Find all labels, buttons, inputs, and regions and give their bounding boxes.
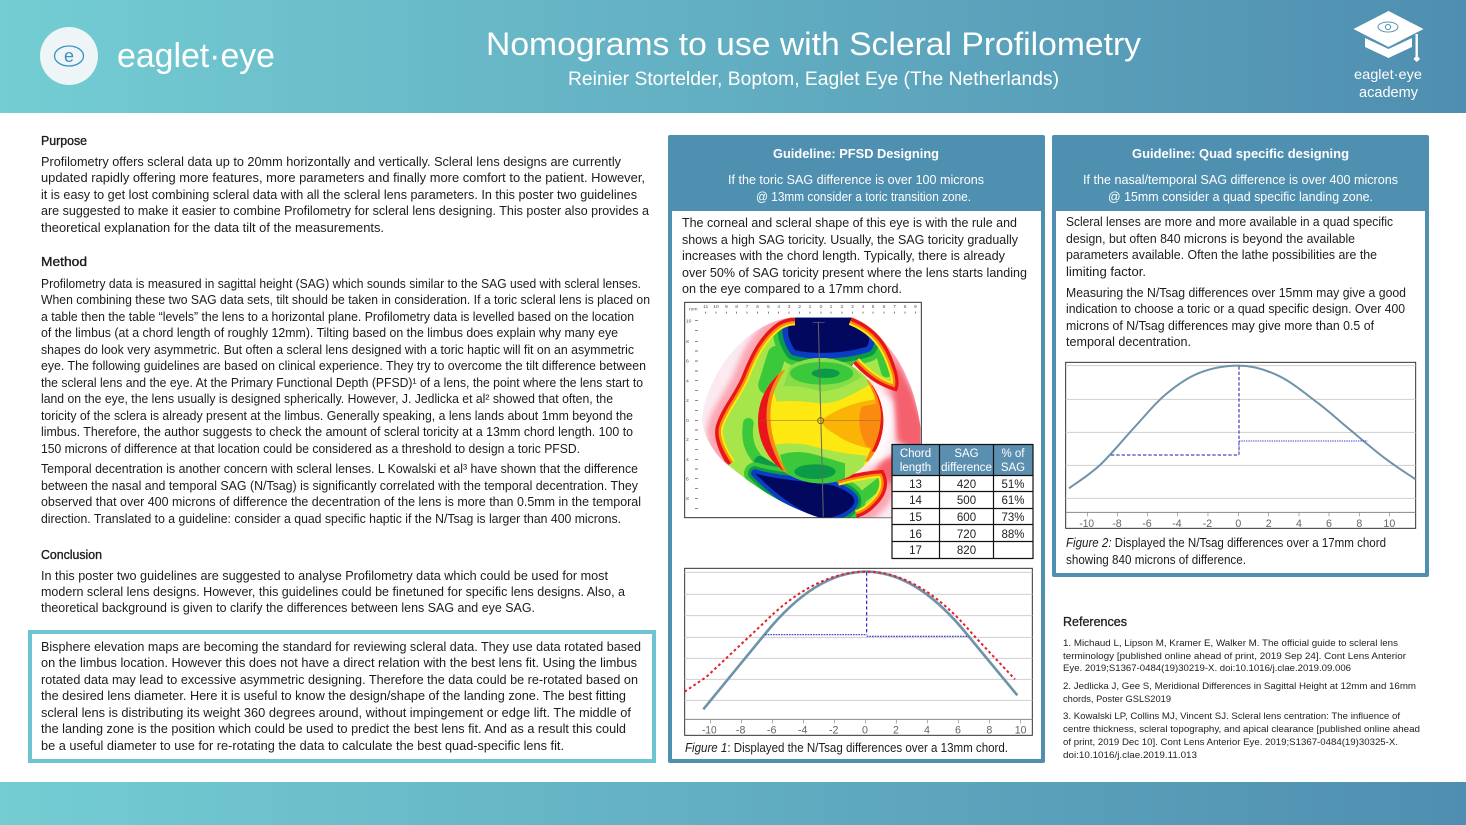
table: chord length vs SAG difference: 14: [909, 495, 922, 507]
panel heading: quad specific: If the nasal/temporal SAG difference is over 400 microns: [1083, 172, 1398, 187]
map axis scale: 1: [809, 304, 812, 310]
table: chord length vs SAG difference: 13: [909, 479, 922, 491]
purpose text: it is easy to get lost combining scleral data with all the scleral lens parameters. In this poster two guidelines: [41, 187, 637, 202]
callout: bisphere elevation maps: [30, 632, 654, 761]
map axis scale: 8: [686, 496, 689, 502]
method text: of the limbus (at a chord length of roughly 12mm). Tilting based on the limbus does explain why many eye: [41, 325, 618, 340]
purpose text: are suggested to make it easier to combine Profilometry for scleral lens designing. This poster also provides a: [41, 203, 650, 218]
callout: bisphere elevation maps: rotated data may lead to excessive asymmetric designing. Therefore the data could be re-rotated based on: [41, 672, 638, 687]
table: chord length vs SAG difference: % of: [1001, 448, 1025, 460]
heading: conclusion: Conclusion: [41, 547, 102, 562]
map axis scale: 10: [686, 318, 692, 324]
map axis scale: 7: [893, 304, 896, 310]
table: chord length vs SAG difference: 15: [909, 512, 922, 524]
purpose text: [41, 154, 650, 235]
callout: bisphere elevation maps: be a useful diameter to use for re-rotating the data to calculate the best quad-specific lens fit.: [41, 738, 564, 753]
panel: quad specific guideline: [1052, 135, 1429, 577]
panel heading: PFSD: Guideline: PFSD Designing: [773, 146, 939, 161]
chart 1 axis labels: [702, 724, 1027, 736]
method text: eye. The following guidelines are based on clinical experience. They try to overcome the tilt difference between: [41, 358, 646, 373]
map axis scale: 2: [841, 304, 844, 310]
method text: land on the eye, the lens usually is designed spherically. However, J. Jedlicka et al² showed that often, the: [41, 391, 613, 406]
map axis scale: 3: [851, 304, 854, 310]
chart 2 axis labels: 10: [1383, 518, 1395, 530]
table: chord length vs SAG difference: SAG: [954, 448, 979, 460]
table: chord length vs SAG difference: 500: [957, 495, 976, 507]
PFSD body text: shows a high SAG toricity. Usually, the SAG toricity gradually: [682, 232, 1018, 247]
method text: When combining these two SAG data sets, tilt should be taken in consideration. If a toric scleral lens is placed on: [41, 292, 650, 307]
map axis scale: 8: [686, 339, 689, 345]
PFSD body text: The corneal and scleral shape of this eye is with the rule and: [682, 215, 1017, 230]
map axis scale: 0: [686, 418, 689, 424]
table: chord length vs SAG difference: Chord: [900, 448, 931, 460]
quad specific body text: temporal decentration.: [1066, 334, 1191, 349]
map axis scale: 4: [862, 304, 865, 310]
panel: PFSD designing guideline: [668, 135, 1045, 763]
map axis scale: 3: [788, 304, 791, 310]
chart: N/Tsag differences over 13mm: [685, 568, 1032, 736]
table: chord length vs SAG difference: 17: [909, 545, 922, 557]
header banner: [0, 0, 1466, 113]
map axis scale: mm: [689, 307, 697, 313]
map axis scale: 4: [686, 378, 689, 384]
chart 1 axis labels: 2: [893, 724, 899, 736]
method text: shapes do look very asymmetric. But often a scleral lens designed with a toric haptic will fit on an asymmetric: [41, 342, 634, 357]
method text: [41, 276, 650, 526]
method text: toricity of the sclera is already present at the limbus. Generally speaking, a lens lands about 1mm beyond the: [41, 408, 633, 423]
table: chord length vs SAG difference: SAG: [1001, 462, 1025, 474]
reference list: chords, Poster GSLS2019: [1063, 694, 1171, 705]
reference list: doi:10.1016/j.clae.2019.11.013: [1063, 750, 1197, 761]
chart 1 axis labels: 0: [862, 724, 868, 736]
table: chord length vs SAG difference: 16: [909, 529, 922, 541]
purpose text: theoretical explanation for the data tilt of the measurements.: [41, 220, 384, 235]
chart 1 axis labels: 6: [955, 724, 961, 736]
purpose text: Profilometry offers scleral data up to 20mm horizontally and vertically. Scleral lens designs are currently: [41, 154, 621, 169]
map axis scale: 5: [872, 304, 875, 310]
chart 1 axis labels: 4: [924, 724, 930, 736]
callout: bisphere elevation maps: the landing zone is the position which could be used to predict the best lens fit. And as a result this could: [41, 721, 626, 736]
chart 1 axis labels: -10: [702, 724, 717, 736]
map axis scale: 11: [703, 304, 708, 310]
reference list: 1. Michaud L, Lipson M, Kramer E, Walker M. The official guide to scleral lens: [1063, 638, 1398, 649]
purpose text: updated rapidly offering more features, more parameters and finally more comfort to the patient. However,: [41, 170, 645, 185]
figure 1 caption: Figure 1: Displayed the N/Tsag differences over a 13mm chord.: [685, 740, 1008, 755]
quad specific body text: Measuring the N/Tsag differences over 15mm may give a good: [1066, 285, 1406, 300]
table: chord length vs SAG difference: 420: [957, 479, 976, 491]
table: chord length vs SAG difference: 820: [957, 545, 976, 557]
callout: bisphere elevation maps: the desired lens diameter. Here it is useful to know the design/shape of the landing zone. The best fitting: [41, 688, 626, 703]
method text: limbus. Therefore, the author suggests to check the amount of scleral toricity at a 13mm chord length. 100 to: [41, 424, 633, 439]
logo: eaglet eye academy cap: [1354, 11, 1424, 101]
subtitle: Reinier Stortelder, Boptom, Eaglet Eye (The Netherlands): [568, 69, 1059, 90]
quad specific body text: design, but often 840 microns is beyond the available: [1066, 231, 1355, 246]
quad specific body text: [1066, 214, 1406, 349]
quad specific body text: Scleral lenses are more and more available in a quad specific: [1066, 214, 1393, 229]
section: purpose: [41, 133, 650, 235]
quad specific body text: parameters available. Often the lathe possibilities are the: [1066, 247, 1377, 262]
method text: observed that over 400 microns of difference the decentration of the lens is more than 0.5mm in the temporal: [41, 494, 641, 509]
map axis scale: 6: [686, 359, 689, 365]
conclusion text: In this poster two guidelines are suggested to analyse Profilometry data which could be used for most: [41, 568, 608, 583]
map axis scale: 8: [904, 304, 907, 310]
method text: the scleral lens and the eye. At the Primary Functional Depth (PFSD)¹ of a lens, the point where the lens start to: [41, 375, 643, 390]
method text: direction. Translated to a guideline: consider a quad specific haptic if the N/Tsag is larger than 400 microns.: [41, 511, 621, 526]
reference list: [1063, 638, 1420, 761]
chart 2 axis labels: -2: [1203, 518, 1212, 530]
map axis scale: 1: [830, 304, 833, 310]
map axis scale: 4: [777, 304, 780, 310]
chart 2 axis labels: -6: [1142, 518, 1152, 530]
method text: Temporal decentration is another concern with scleral lenses. L Kowalski et al³ have shown that the difference: [41, 461, 638, 476]
chart: N/Tsag differences over 17mm: [1066, 362, 1416, 530]
table: chord length vs SAG difference: 88%: [1001, 529, 1025, 541]
map axis scale: 5: [767, 304, 770, 310]
map axis scale: 6: [756, 304, 759, 310]
PFSD body text: [682, 215, 1027, 296]
chart 1 axis labels: 10: [1015, 724, 1027, 736]
map axis scale: 0: [820, 304, 823, 310]
reference list: 2. Jedlicka J, Gee S, Meridional Differences in Sagittal Height at 12mm and 16mm: [1063, 681, 1416, 692]
conclusion text: [41, 568, 626, 615]
logo: eaglet eye: e: [64, 46, 74, 66]
chart 2 axis labels: -10: [1079, 518, 1094, 530]
panel heading: PFSD: [728, 146, 984, 204]
section: method: [41, 254, 650, 526]
conclusion text: modern scleral lens designs. However, this guidelines could be finetuned for specific lens designs. Also, a: [41, 584, 626, 599]
figure 2 caption: showing 840 microns of difference.: [1066, 552, 1246, 567]
footer banner: [0, 782, 1466, 825]
callout: bisphere elevation maps: on the limbus location. However this does not have a direct relation with the best lens fit. Using the limbus: [41, 655, 637, 670]
panel heading: quad specific: @ 15mm consider a quad specific landing zone.: [1108, 189, 1373, 204]
chart 1 axis labels: -4: [798, 724, 807, 736]
reference list: terminology [published online ahead of print, 2019 Sep 24]. Cont Lens Anterior: [1063, 651, 1407, 662]
PFSD body text: over 50% of SAG toricity present where the lens starts landing: [682, 265, 1027, 280]
map axis scale: 9: [725, 304, 728, 310]
panel heading: quad specific: [1083, 146, 1398, 204]
chart 2 axis labels: 0: [1235, 518, 1241, 530]
chart 2 axis labels: 8: [1356, 518, 1362, 530]
map axis scale: 9: [914, 304, 917, 310]
heading: purpose: Purpose: [41, 133, 87, 148]
table: chord length vs SAG difference: 720: [957, 529, 976, 541]
map axis scale: 6: [686, 476, 689, 482]
table: chord length vs SAG difference: difference: [941, 462, 992, 474]
references heading: References: [1063, 614, 1127, 629]
conclusion text: theoretical background is given to clarify the differences between lens SAG and eye SAG.: [41, 600, 535, 615]
chart 2 axis labels: 2: [1266, 518, 1272, 530]
table: chord length vs SAG difference: 73%: [1001, 512, 1025, 524]
chart 1 axis labels: -6: [767, 724, 776, 736]
panel heading: quad specific: Guideline: Quad specific designing: [1132, 146, 1349, 161]
table: chord length vs SAG difference: 600: [957, 512, 976, 524]
map axis scale: 6: [883, 304, 886, 310]
method text: Profilometry data is measured in sagittal height (SAG) which sounds similar to the SAG used with scleral lenses.: [41, 276, 641, 291]
chart 2 axis labels: [1079, 518, 1395, 530]
panel heading: PFSD: If the toric SAG difference is over 100 microns: [728, 172, 984, 187]
chart 1 axis labels: 8: [986, 724, 992, 736]
logo: eaglet eye academy cap: eaglet·eye: [1354, 66, 1422, 82]
heading: method: Method: [41, 254, 87, 269]
map axis scale: 7: [746, 304, 749, 310]
callout: bisphere elevation maps: Bisphere elevation maps are becoming the standard for reviewing scleral data. They use data rotated based: [41, 639, 641, 654]
map axis scale: [686, 304, 917, 508]
callout: bisphere elevation maps: scleral lens is distributing its weight 360 degrees around, without impingement or edge lift. The middle of: [41, 705, 631, 720]
map axis scale: 4: [686, 457, 689, 463]
map axis scale: 8: [735, 304, 738, 310]
method text: a table then the table “levels” the lens to a horizontal plane. Profilometry data is levelled based on the location: [41, 309, 634, 324]
logo: eaglet eye: eaglet·eye: [117, 37, 275, 75]
quad specific body text: microns of N/Tsag differences may give more than 0.5 of: [1066, 318, 1374, 333]
method text: 150 microns of difference at that location could be considered as a threshold to design a toric PFSD.: [41, 441, 580, 456]
chart 1 axis labels: -8: [736, 724, 745, 736]
scleral height map: [685, 302, 926, 522]
chart 1 axis labels: -2: [829, 724, 838, 736]
reference list: of print, 2019 Dec 10]. Cont Lens Anterior Eye. 2019;S1367-0484(19)30325-X.: [1063, 737, 1398, 748]
chart 2 axis labels: -4: [1172, 518, 1182, 530]
chart 2 axis labels: 6: [1326, 518, 1332, 530]
table: chord length vs SAG difference: 61%: [1001, 495, 1025, 507]
section: conclusion: [41, 547, 626, 615]
method text: between the nasal and temporal SAG (N/Tsag) is significantly correlated with the temporal decentration. They: [41, 478, 638, 493]
chart 2 axis labels: -8: [1112, 518, 1122, 530]
PFSD body text: on the eye compared to a 17mm chord.: [682, 281, 902, 296]
quad specific body text: limiting factor.: [1066, 264, 1146, 279]
panel heading: PFSD: @ 13mm consider a toric transition zone.: [756, 189, 971, 204]
references: [1063, 614, 1420, 761]
reference list: centre thickness, scleral topography, and apical clearance [published online ahead: [1063, 724, 1420, 735]
map axis scale: 10: [713, 304, 719, 310]
chart 2 axis labels: 4: [1296, 518, 1302, 530]
reference list: Eye. 2019;S1367-0484(19)30219-X. doi:10.1016/j.clae.2019.09.006: [1063, 663, 1351, 674]
logo: eaglet eye academy cap: academy: [1359, 84, 1418, 101]
map axis scale: 2: [686, 437, 689, 443]
logo: eaglet eye: [40, 27, 275, 85]
map axis scale: 2: [798, 304, 801, 310]
figure 2 caption: [1066, 535, 1386, 567]
table: chord length vs SAG difference: [892, 444, 1033, 559]
table: chord length vs SAG difference: 51%: [1001, 479, 1025, 491]
figure 2 caption: Figure 2: Displayed the N/Tsag differences over a 17mm chord: [1066, 535, 1386, 550]
reference list: 3. Kowalski LP, Collins MJ, Vincent SJ. Scleral lens centration: The influence of: [1063, 711, 1400, 722]
table: chord length vs SAG difference: length: [900, 462, 931, 474]
title: Nomograms to use with Scleral Profilometry: [486, 26, 1141, 62]
quad specific body text: indication to choose a toric or a quad specific design. Over 400: [1066, 301, 1405, 316]
map axis scale: 2: [686, 398, 689, 404]
PFSD body text: increases with the chord length. Typically, there is already: [682, 248, 1005, 263]
